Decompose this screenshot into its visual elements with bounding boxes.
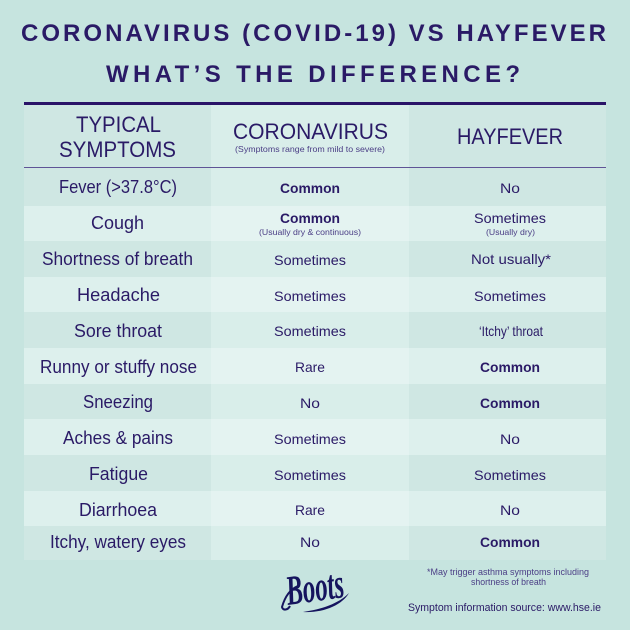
symptom names column: Itchy, watery eyes	[50, 532, 186, 552]
symptom names column: Sneezing	[83, 392, 153, 412]
footnote: *May trigger asthma symptoms including	[427, 567, 589, 578]
symptom names column: Fever (>37.8°C)	[59, 177, 177, 197]
coronavirus column	[259, 180, 361, 550]
symptom names column: Diarrhoea	[79, 500, 158, 520]
hayfever column: Common	[480, 534, 540, 550]
coronavirus column: Common	[280, 210, 340, 226]
coronavirus column: Sometimes	[274, 431, 346, 447]
footnote	[427, 567, 589, 588]
coronavirus column: Sometimes	[274, 288, 346, 304]
coronavirus column: Rare	[295, 359, 325, 375]
symptom names column: Runny or stuffy nose	[40, 357, 197, 377]
title: CORONAVIRUS (COVID-19) VS HAYFEVER	[21, 20, 606, 47]
title: WHAT’S THE DIFFERENCE?	[106, 61, 520, 88]
hayfever column: Common	[480, 395, 540, 411]
coronavirus column: Sometimes	[274, 252, 346, 268]
logo: Boots	[282, 561, 349, 615]
hayfever column: No	[500, 180, 520, 196]
header: coronavirus: CORONAVIRUS	[233, 119, 388, 144]
hayfever column: No	[500, 431, 520, 447]
symptom names column: Fatigue	[89, 464, 148, 484]
coronavirus column: Rare	[295, 502, 325, 518]
hayfever column: Common	[480, 359, 540, 375]
coronavirus column: Sometimes	[274, 467, 346, 483]
header: coronavirus: (Symptoms range from mild to severe)	[235, 144, 385, 154]
header: typical symptoms: SYMPTOMS	[59, 137, 176, 162]
symptom names column	[40, 177, 197, 552]
symptom names column: Headache	[77, 285, 160, 305]
source line: Symptom information source: www.hse.ie	[408, 602, 601, 614]
header: hayfever: HAYFEVER	[457, 124, 563, 149]
logo: Boots: Boots	[282, 561, 347, 615]
coronavirus column: (Usually dry & continuous)	[259, 227, 361, 237]
symptom names column: Sore throat	[74, 321, 162, 341]
footnote: shortness of breath	[471, 577, 546, 588]
hayfever column: ‘Itchy’ throat	[479, 323, 543, 339]
hayfever column: Sometimes	[474, 467, 546, 483]
hayfever column: Sometimes	[474, 210, 546, 226]
coronavirus column: Sometimes	[274, 323, 346, 339]
symptom names column: Cough	[91, 213, 144, 233]
hayfever column	[471, 180, 552, 550]
hayfever column: (Usually dry)	[486, 227, 535, 237]
hayfever column: No	[500, 502, 520, 518]
header: typical symptoms: TYPICAL	[76, 112, 161, 137]
symptom names column: Aches & pains	[63, 428, 173, 448]
header: typical symptoms	[59, 112, 176, 162]
hayfever column: Sometimes	[474, 288, 546, 304]
comparison table	[24, 102, 606, 560]
coronavirus column: No	[300, 395, 320, 411]
hayfever column: Not usually*	[471, 251, 552, 267]
symptom names column: Shortness of breath	[42, 249, 193, 269]
title	[21, 20, 606, 88]
header: coronavirus	[233, 119, 388, 154]
coronavirus column: Common	[280, 180, 340, 196]
coronavirus column: No	[300, 534, 320, 550]
